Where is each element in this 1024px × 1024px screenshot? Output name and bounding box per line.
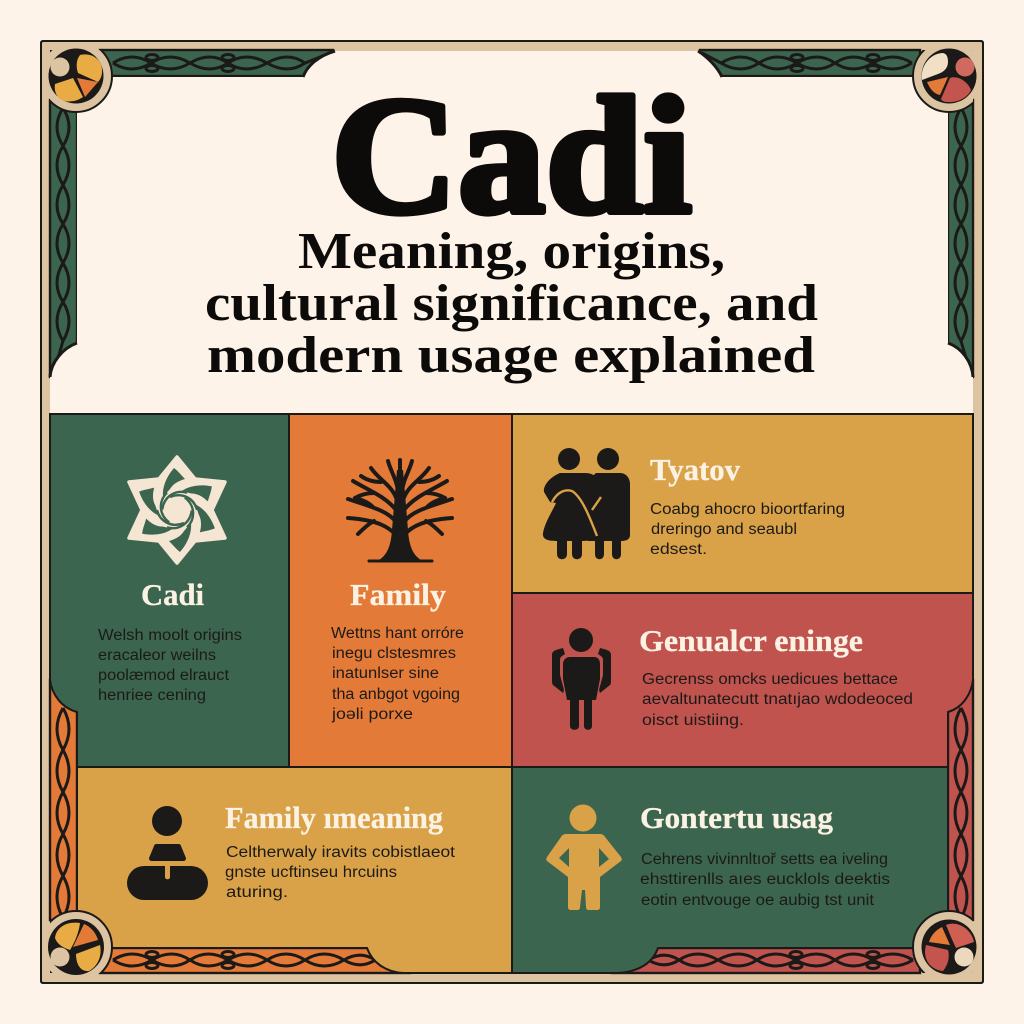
body text: tha anbgot vgoing — [332, 686, 460, 703]
panel: Genualcr eninge — [512, 593, 973, 767]
body text: aturing. — [226, 884, 288, 901]
icon: child with raised arms — [552, 628, 611, 730]
body text — [98, 627, 242, 704]
body text — [650, 501, 845, 558]
border: left orange band — [50, 680, 77, 920]
heading: Cadi — [141, 577, 204, 612]
subtitle: Meaning, origins, — [298, 223, 725, 280]
body text: Wettns hant orróre — [331, 625, 464, 642]
body text: Welsh moolt origins — [98, 627, 242, 644]
icon: seated person — [127, 806, 208, 900]
body text: Celtherwaly iravits cobistlaeot — [226, 844, 456, 861]
body text: poolæmod elrauct — [98, 667, 230, 684]
panel: Cadi — [50, 414, 289, 767]
subtitle — [205, 223, 818, 384]
body text: joəli porxe — [331, 706, 413, 723]
body text: Coabg ahocro bioortfaring — [650, 501, 845, 518]
body text: oisct uistiing. — [642, 712, 744, 729]
heading: Gontertu usag — [640, 800, 833, 835]
subtitle: cultural significance, and — [205, 275, 818, 332]
body text — [225, 844, 456, 901]
icon: tree — [348, 460, 452, 561]
heading: Genualcr eninge — [639, 623, 863, 658]
medallion: bottom right — [912, 910, 976, 974]
body text: henriee cening — [98, 687, 206, 704]
heading: Family ımeaning — [225, 800, 443, 835]
body text: eracaleor weilns — [98, 647, 216, 664]
body text — [642, 671, 913, 729]
body text: Cehrens vivinnltıoř setts ea iveling — [641, 851, 888, 868]
medallion: bottom left — [48, 910, 113, 975]
border: right red band — [948, 680, 973, 920]
body text: ehsttirenlls aıes eucklols deektis — [640, 871, 890, 888]
heading: Tyatov — [650, 452, 740, 487]
body text: aevaltunatecutt tnatıjao wdodeoced — [642, 691, 913, 708]
panel: Tyatov — [512, 414, 973, 593]
body text: gnste ucftinseu hrcuins — [225, 864, 397, 881]
icon: couple — [543, 448, 630, 559]
border: left green band — [50, 100, 77, 377]
icon: standing person — [546, 804, 622, 910]
subtitle: modern usage explained — [207, 327, 815, 384]
heading: Family — [350, 577, 447, 612]
body text: eotin entvouge oe aubig tst unit — [641, 892, 875, 909]
title: Cadi — [331, 63, 692, 249]
border: bottom orange band — [100, 948, 410, 973]
panel: Family — [289, 414, 512, 767]
border: top right green band — [700, 50, 920, 76]
body text — [640, 851, 890, 909]
body text: dreringo and seaubl — [651, 521, 797, 538]
panel: Gontertu usag — [512, 767, 948, 973]
body text — [331, 625, 464, 723]
body text: Gecrenss omcks uedicues bettace — [642, 671, 898, 688]
body text: inegu clstesmres — [332, 645, 456, 662]
border: right green band — [948, 100, 973, 377]
border: top left green band — [100, 50, 333, 76]
body text: inatunlser sine — [332, 665, 439, 682]
panel: Family meaning — [77, 767, 512, 973]
medallion: top left — [48, 48, 113, 113]
title panel background — [50, 51, 973, 414]
body text: edsest. — [650, 541, 707, 558]
icon: celtic knot — [129, 457, 225, 563]
medallion: top right — [912, 48, 976, 113]
border: bottom red band — [612, 948, 920, 973]
